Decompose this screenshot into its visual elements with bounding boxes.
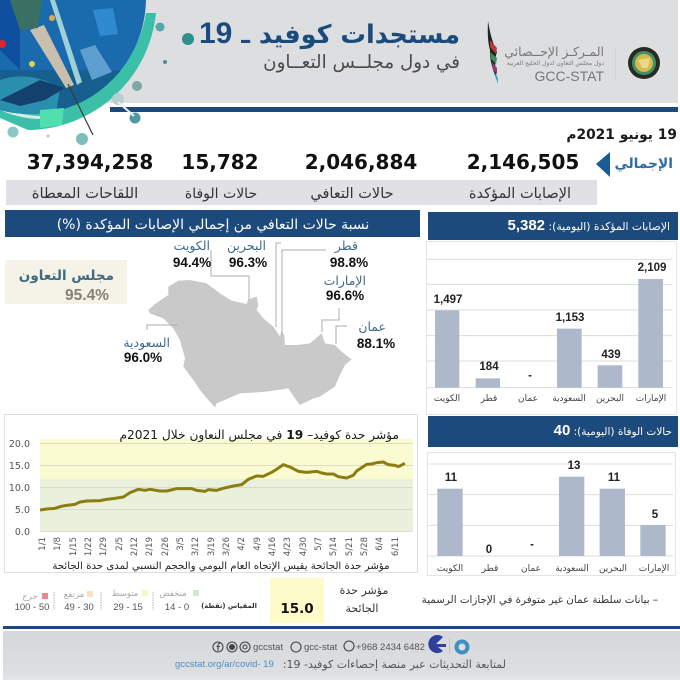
- stat: deaths: 15,782: [181, 150, 259, 174]
- x axis date labels: 3/26: [222, 537, 232, 556]
- severity score box: [270, 578, 324, 623]
- x axis date labels: 1/8: [53, 537, 63, 551]
- footer logos: [428, 635, 470, 654]
- y axis gridlines and labels: 0.0: [15, 527, 30, 538]
- stat: recovered: [305, 150, 417, 202]
- heading: [428, 212, 678, 240]
- header band: [0, 0, 678, 112]
- x axis date labels: 1/29: [99, 537, 109, 556]
- bar chart: الإمارات: [636, 394, 666, 404]
- map leader lines: [147, 243, 347, 344]
- contact line: gcc-stat: [304, 642, 338, 653]
- label: Oman: [357, 319, 395, 351]
- bar chart: -: [530, 539, 534, 551]
- label: Qatar: 98.8%: [330, 255, 368, 270]
- contact line: gccstat: [253, 642, 283, 653]
- bar chart: 5: [652, 509, 659, 521]
- subtitle: في دول مجلــس التعــاون: [263, 52, 460, 73]
- stat: confirmed: 2,146,505: [467, 150, 579, 174]
- map heading: نسبة حالات التعافي من إجمالي الإصابات المؤكدة (%): [57, 217, 369, 233]
- scale: medium: متوسط: [112, 589, 138, 599]
- bar chart: عمان: [521, 564, 541, 574]
- bar chart: 439: [601, 349, 621, 361]
- x axis date labels: 1/15: [69, 537, 79, 556]
- bar chart: البحرين: [596, 394, 624, 404]
- footer link line: لمتابعة التحديثات عبر منصة إحصاءات كوفيد- 19:: [283, 658, 506, 671]
- heading: حالات الوفاة (اليومية): 40: [554, 422, 672, 439]
- x axis date labels: 4/23: [283, 537, 293, 556]
- bar chart: الكويت: [434, 394, 460, 404]
- scale: medium: 29 - 15: [113, 602, 143, 613]
- bar chart: 2,109: [638, 262, 666, 274]
- label strip: [6, 180, 597, 205]
- label: Saudi Arabia: السعودية: [123, 335, 170, 351]
- logo: GCC-STAT: دول مجلس التعاون لدول الخليج العربية: [507, 60, 604, 67]
- x axis date labels: 5/7: [314, 537, 324, 551]
- GCC average card: مجلس التعاون: [19, 268, 114, 284]
- label: Oman: 88.1%: [357, 336, 395, 351]
- scale: high: مرتفع: [64, 590, 84, 600]
- severity score box: 15.0: [280, 601, 314, 617]
- panel: severity line chart: [4, 414, 418, 572]
- bar chart: قطر: [480, 394, 497, 404]
- label: Kuwait: الكويت: [174, 238, 210, 254]
- bar chart: الكويت: [437, 564, 463, 574]
- logo: GCC-STAT: GCC-STAT: [535, 68, 604, 84]
- scale: medium: [112, 589, 148, 613]
- bar chart: 184: [479, 361, 499, 373]
- bar chart: 11: [608, 472, 621, 484]
- x axis date labels: 2/12: [130, 537, 140, 556]
- title: مستجدات كوفيد ـ 19: [199, 17, 460, 50]
- scale: critical: 100 - 50: [15, 602, 49, 613]
- label: Qatar: [330, 238, 368, 270]
- Oman data note: – بيانات سلطنة عمان غير متوفرة في الإجازات الرسمية: [422, 594, 658, 606]
- bar chart: السعودية: [555, 564, 589, 574]
- y axis gridlines and labels: [9, 439, 413, 538]
- scale: low: 14 - 0: [165, 602, 189, 613]
- bar chart: 1,497: [434, 294, 462, 306]
- x axis date labels: [38, 537, 401, 556]
- label: Bahrain: [227, 238, 267, 270]
- total label: الإجمالي: [614, 156, 673, 172]
- bar chart: 13: [568, 460, 580, 472]
- y axis gridlines and labels: 15.0: [9, 461, 30, 472]
- bar chart: [426, 242, 676, 414]
- x axis date labels: 5/14: [329, 537, 339, 556]
- severity label: [340, 584, 388, 615]
- label: UAE: [324, 273, 366, 303]
- scale: low: [159, 589, 199, 613]
- footer link line: [175, 658, 506, 671]
- x axis date labels: 2/19: [145, 537, 155, 556]
- x axis date labels: 4/30: [299, 537, 309, 556]
- totals row: [6, 150, 673, 205]
- label: Bahrain: 96.3%: [229, 255, 267, 270]
- label: Kuwait: [173, 238, 211, 270]
- x axis date labels: 1/1: [38, 537, 48, 551]
- bar chart: السعودية: [552, 394, 586, 404]
- stat: vaccines: 37,394,258: [27, 150, 153, 174]
- stat: confirmed: [467, 150, 579, 202]
- heading: الإصابات المؤكدة (اليومية): 5,382: [507, 217, 670, 234]
- bar chart: قطر: [481, 564, 498, 574]
- chart note: مؤشر حدة الجائحة يقيس الإتجاه العام اليومي والحجم النسبي لمدى حدة الجائحة: [52, 561, 390, 572]
- stat: deaths: [181, 150, 259, 202]
- scale: high: 49 - 30: [64, 602, 94, 613]
- severity scale legend: [15, 589, 257, 613]
- stat: vaccines: [27, 150, 153, 202]
- label: Saudi Arabia: 96.0%: [124, 350, 162, 365]
- label: Saudi Arabia: [123, 335, 170, 365]
- arrow: [596, 152, 610, 177]
- footer link line: gccstat.org/ar/covid- 19: [175, 659, 274, 670]
- x axis date labels: 5/28: [360, 537, 370, 556]
- x axis date labels: 4/2: [237, 537, 247, 551]
- y axis gridlines and labels: 5.0: [15, 505, 30, 516]
- x axis date labels: 5/21: [345, 537, 355, 556]
- severity bands: [40, 439, 413, 531]
- social icons: [213, 641, 354, 652]
- label: UAE: الإمارات: [324, 273, 366, 289]
- severity line: [40, 462, 405, 510]
- y axis gridlines and labels: 20.0: [9, 439, 30, 450]
- bar chart: 11: [445, 472, 458, 484]
- stat: recovered: حالات التعافي: [310, 186, 394, 202]
- x axis date labels: 3/19: [207, 537, 217, 556]
- footer: [3, 626, 680, 680]
- bar chart: 1,153: [556, 312, 584, 324]
- panel: recovery map: [5, 210, 420, 407]
- x axis date labels: 4/16: [268, 537, 278, 556]
- severity label: مؤشر حدة: [340, 584, 388, 597]
- logo: GCC emblem: [628, 47, 660, 79]
- GCC average card: [5, 260, 127, 304]
- bar chart: البحرين: [599, 564, 627, 574]
- label: Qatar: قطر: [334, 238, 358, 254]
- contact line: [253, 642, 425, 653]
- label: Kuwait: 94.4%: [173, 255, 211, 270]
- bar chart: الإمارات: [639, 564, 669, 574]
- scale: low: منخفض: [159, 589, 187, 599]
- logo: GCC-STAT: المـركـز الإحــصائي: [504, 44, 604, 60]
- severity label: الجائحة: [346, 602, 378, 615]
- x axis date labels: 6/11: [391, 537, 401, 556]
- header illustration: vaccine and virus: [0, 0, 194, 145]
- scale: critical: [15, 592, 49, 613]
- scale: critical: حرج: [22, 592, 38, 602]
- x axis date labels: 1/22: [84, 537, 94, 556]
- chart title: مؤشر حدة كوفيد– 19 في مجلس النعاون خلال 2021م: [119, 428, 399, 443]
- bar chart: عمان: [518, 394, 538, 404]
- x axis date labels: 3/12: [191, 537, 201, 556]
- heading: [428, 416, 678, 447]
- bar chart: -: [528, 370, 532, 382]
- label: Oman: عمان: [358, 319, 386, 334]
- label: Bahrain: البحرين: [227, 238, 266, 254]
- panel: daily confirmed cases: [426, 212, 678, 414]
- x axis date labels: 2/5: [115, 537, 125, 551]
- map shape: [148, 280, 352, 407]
- stat: confirmed: الإصابات المؤكدة: [469, 186, 571, 202]
- contact line: +968 2434 6482: [356, 642, 425, 653]
- x axis date labels: 6/4: [375, 537, 385, 551]
- severity scale legend: المقياس (نقطة): [201, 602, 257, 610]
- label: UAE: 96.6%: [326, 288, 364, 303]
- GCC average card: 95.4%: [65, 287, 109, 304]
- stat: recovered: 2,046,884: [305, 150, 417, 174]
- date: 19 يونيو 2021م: [566, 127, 677, 143]
- bar chart: [428, 452, 676, 576]
- map heading: [5, 210, 420, 237]
- y axis gridlines and labels: 10.0: [9, 483, 30, 494]
- panel: daily deaths: [428, 416, 678, 576]
- stat: vaccines: اللقاحات المعطاة: [32, 185, 138, 202]
- logo: GCC-STAT: [488, 21, 616, 84]
- x axis date labels: 3/5: [176, 537, 186, 551]
- bar chart: 0: [486, 544, 492, 556]
- x axis date labels: 4/9: [253, 537, 263, 551]
- x axis date labels: 2/26: [161, 537, 171, 556]
- stat: deaths: حالات الوفاة: [185, 186, 257, 202]
- scale: high: [64, 590, 94, 613]
